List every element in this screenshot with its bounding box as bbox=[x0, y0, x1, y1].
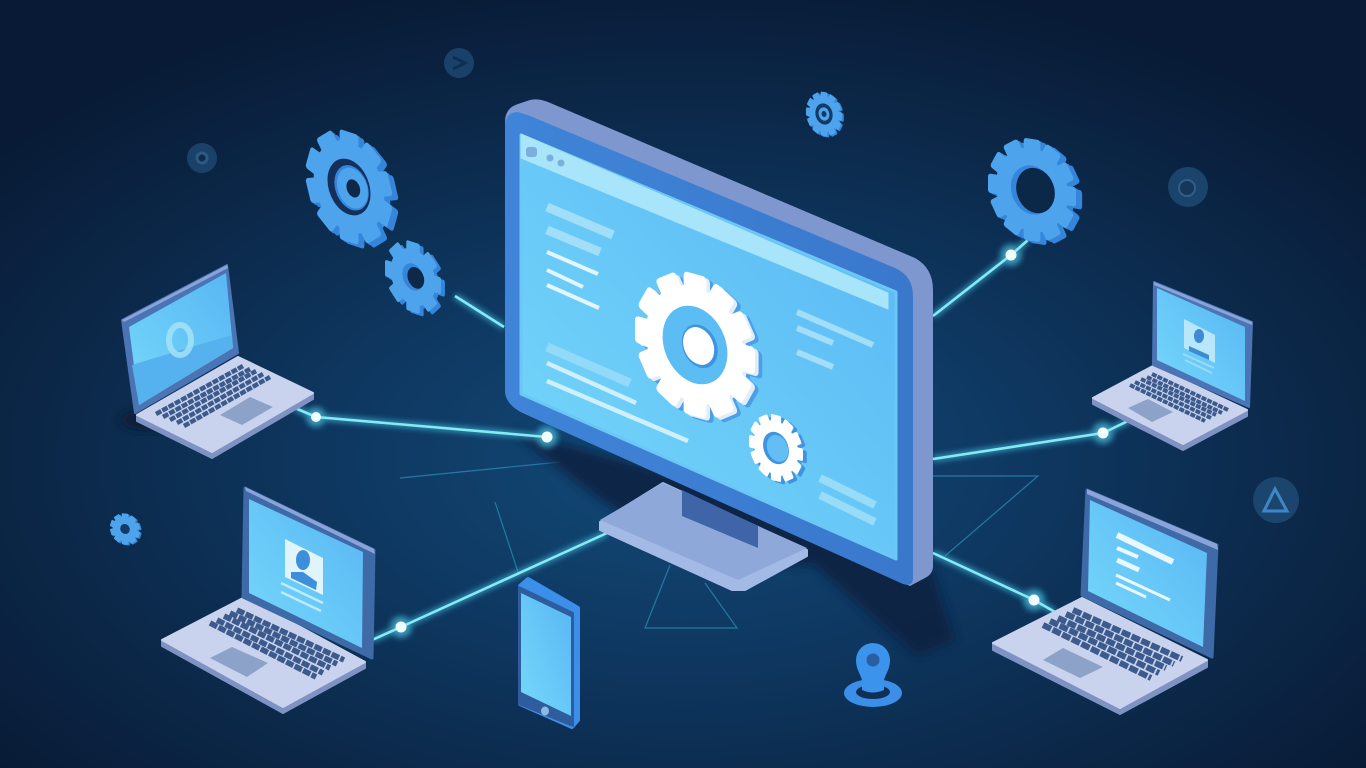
phone bbox=[519, 579, 578, 727]
gear: small top bbox=[806, 90, 844, 140]
icon: map pin bbox=[844, 643, 902, 707]
gear: tiny left bbox=[110, 512, 142, 547]
connector strokes bbox=[295, 240, 1130, 640]
laptop: top left bbox=[120, 265, 313, 458]
monitor bezel bbox=[505, 112, 913, 585]
central monitor bbox=[505, 99, 933, 586]
screen text lines bbox=[547, 207, 875, 522]
connector nodes bbox=[311, 250, 1108, 632]
connector glow bbox=[295, 240, 1130, 640]
small white gear bbox=[749, 408, 807, 490]
faint background triangle lines bbox=[400, 462, 1038, 628]
connector lines bbox=[295, 240, 1130, 640]
monitor screen bbox=[521, 135, 896, 559]
gear: large upper left bbox=[305, 118, 399, 260]
gear: large upper right bbox=[988, 132, 1082, 251]
laptop: bottom right bbox=[993, 489, 1218, 714]
monitor shadow bbox=[510, 430, 955, 657]
browser dots bbox=[526, 147, 564, 166]
monitor stand bbox=[600, 483, 807, 590]
monitor rim bbox=[505, 99, 933, 586]
badges: faint floating circles bbox=[187, 48, 1299, 523]
laptop: top right bbox=[1093, 282, 1252, 450]
browser top bar bbox=[521, 134, 888, 309]
large white gear bbox=[635, 258, 762, 437]
laptop: bottom left bbox=[162, 487, 375, 713]
gear: small upper left bbox=[385, 233, 445, 324]
